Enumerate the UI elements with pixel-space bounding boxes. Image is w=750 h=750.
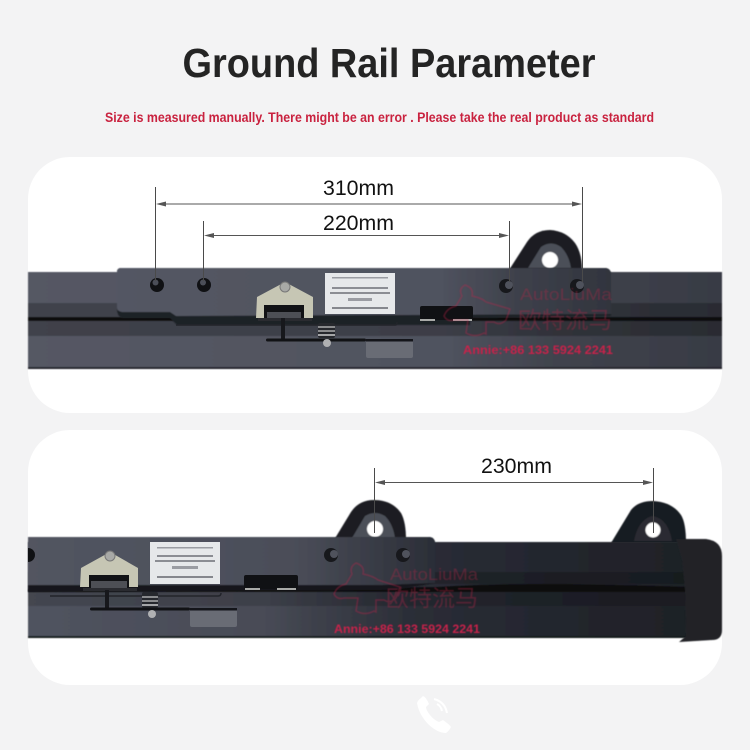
- watermark: contact number: Annie:+86 133 5924 2241: [463, 343, 613, 357]
- dimension: 230mm: [374, 454, 654, 533]
- dimension: 220mm: 220mm: [323, 211, 394, 235]
- watermark: logo and brand: AutoLiuMa: [520, 285, 613, 304]
- stud: far left: [150, 278, 164, 292]
- black slot: [420, 306, 473, 321]
- slot line: [50, 593, 221, 596]
- watermark: contact number: Annie:+86 133 5924 2241: [334, 622, 480, 636]
- icon: phone: [417, 696, 451, 733]
- stud: right: [396, 548, 410, 562]
- slot line: [176, 322, 397, 325]
- small tab: [366, 339, 413, 358]
- mounting lug: [509, 230, 582, 270]
- dimension: 310mm: [156, 176, 582, 282]
- disclaimer note: Size is measured manually. There might be an error . Please take the real product as standard: [105, 110, 654, 125]
- rail body: [28, 542, 688, 638]
- panel: top view of rail: [28, 157, 722, 413]
- end cap: [676, 539, 722, 642]
- dimension: 220mm: [204, 211, 510, 282]
- panel: end view of rail: [28, 430, 722, 685]
- watermark: logo and brand: [444, 285, 613, 336]
- latch clip: [256, 282, 313, 321]
- stud: inner left: [197, 278, 211, 292]
- watermark: logo and brand: 欧特流马: [386, 585, 478, 611]
- black slot: [244, 575, 298, 590]
- small tab: [190, 608, 237, 627]
- product label: [150, 542, 220, 584]
- dimension: 230mm: 230mm: [481, 454, 552, 478]
- watermark: logo and brand: [334, 563, 479, 614]
- title: Ground Rail Parameter: [182, 40, 596, 86]
- dimension: 310mm: 310mm: [323, 176, 394, 200]
- slide plate: [117, 268, 611, 325]
- lever with spring: [90, 590, 190, 618]
- watermark: logo and brand: 欧特流马: [518, 307, 612, 333]
- stud: far right: [570, 279, 584, 293]
- stud: inner right: [499, 279, 513, 293]
- right mounting lug: [611, 501, 686, 543]
- stud: partial left: [28, 548, 35, 562]
- watermark: logo and brand: AutoLiuMa: [390, 565, 479, 584]
- stud: centre: [324, 548, 338, 562]
- product label: [325, 273, 395, 314]
- rail body: [28, 272, 722, 369]
- latch clip: [80, 551, 138, 591]
- slide plate: [28, 537, 435, 592]
- left mounting lug: [334, 500, 406, 540]
- lever with spring: [266, 318, 366, 347]
